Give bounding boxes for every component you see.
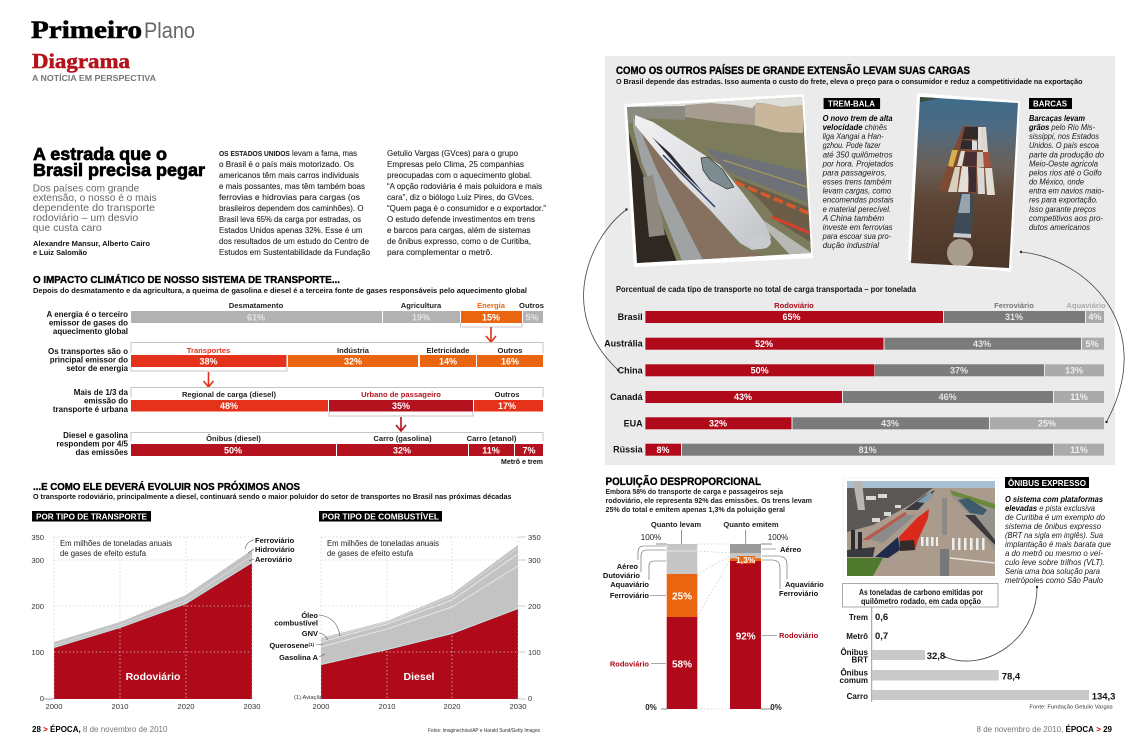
row 2: energy sectors: 16% — [501, 356, 519, 366]
chart: share carried vs emitted: Quanto emitem — [723, 520, 779, 529]
body text column 1: o Brasil é o país mais motorizado. Os — [219, 160, 354, 169]
row: Austrália: 5% — [1085, 339, 1099, 349]
row 2: energy sectors: Os transportes são o — [48, 347, 128, 356]
tag: POR TIPO DE COMBUSTÍVEL — [322, 510, 439, 522]
text: Trem-bala: por hora. Projetados — [822, 159, 894, 168]
body text column 1: Brasil leva 65% da carga por estradas, os — [219, 215, 361, 224]
text: Trem-bala: encomendas postais — [823, 196, 894, 205]
text: Ônibus expresso: a do metrô ou mesmo o veí- — [1005, 549, 1103, 558]
text: Trem-bala: até 350 quilômetros — [823, 150, 893, 159]
area chart: by transport type: Em milhões de toneladas anuais — [60, 539, 172, 548]
row 4: fuel split: Carro (etanol) — [467, 434, 517, 443]
area chart: by transport type — [31, 511, 295, 711]
row: Brasil: Brasil — [618, 312, 643, 322]
heading: projection — [33, 480, 512, 501]
row 1: energy share: 19% — [412, 312, 430, 322]
row 3: transport split — [53, 388, 543, 416]
chart: carbon per km: 134,3 — [1092, 692, 1115, 702]
panel heading: O Brasil depende das estradas. Isso aumenta o custo do frete, eleva o preço para o consumidor e reduz a competitividade na exportação — [616, 77, 1083, 86]
area chart: by transport type: Rodoviário — [126, 671, 180, 683]
row: Rússia: 8% — [656, 445, 670, 455]
area chart: by fuel type: 0 — [528, 694, 532, 703]
heading: disproportionate pollution: 25% do total e emitem apenas 1,3% da poluição geral — [606, 505, 785, 514]
row 4: fuel split: 11% — [482, 446, 500, 456]
body text column 2: Getulio Vargas (GVces) para o grupo — [387, 149, 518, 158]
text: Ônibus expresso — [1005, 495, 1111, 585]
arrow: urban to fuel — [396, 417, 406, 431]
row 4: fuel split: Carro (gasolina) — [373, 434, 432, 443]
right column: emitted: 92% — [736, 632, 756, 642]
chart: carbon per km: 0,6 — [875, 612, 888, 623]
row: Brasil: 4% — [1088, 312, 1102, 322]
section title: Diagrama: Diagrama — [32, 49, 131, 73]
row: Canadá: Canadá — [610, 392, 644, 402]
row 1: energy share: Desmatamento — [229, 301, 284, 310]
byline — [33, 239, 150, 257]
area chart: by transport type: de gases de efeito estufa — [60, 549, 147, 558]
footer left — [32, 725, 540, 734]
chart: carbon per km: Ônibus — [840, 648, 869, 657]
dotted connectors — [697, 544, 730, 709]
area chart: by transport type: Hidroviário — [255, 545, 295, 554]
text: Barcas: Isso garante preços — [1029, 205, 1096, 214]
heading: disproportionate pollution — [606, 475, 812, 514]
row 1: energy share: Outros — [519, 301, 544, 310]
row 2: energy sectors: 38% — [199, 356, 218, 366]
byline: Alexandre Mansur, Alberto Cairo — [33, 239, 150, 248]
standfirst: rodoviário – um desvio — [33, 212, 138, 224]
area chart: by fuel type: de gases de efeito estufa — [327, 549, 414, 558]
row 4: fuel split: Diesel e gasolina — [63, 431, 129, 440]
row: EUA: EUA — [624, 418, 643, 428]
row 4: fuel split: 32% — [393, 446, 411, 456]
row: Canadá: 46% — [939, 392, 957, 402]
row: Rússia — [613, 444, 1104, 456]
body text column 2 — [387, 149, 546, 257]
chart: carbon per km: 32,8 — [927, 651, 945, 662]
text: Trem-bala: O novo trem de alta — [823, 114, 893, 123]
heading: disproportionate pollution: Embora 58% do transporte de carga e passageiros seja — [606, 487, 784, 496]
row 4: fuel split: 7% — [522, 446, 536, 456]
text: Trem-bala: velocidade chinês — [823, 123, 887, 132]
area chart: by fuel type: 100 — [528, 648, 541, 657]
row 1: energy share: Energia — [477, 301, 506, 310]
left column: carried: 25% — [672, 592, 692, 602]
standfirst: dependente do transporte — [33, 202, 155, 214]
heading: projection: ...E COMO ELE DEVERÁ EVOLUIR NOS PRÓXIMOS ANOS — [33, 480, 300, 493]
text: Ônibus expresso: culo leve sobre trilhos (VLT). — [1005, 558, 1105, 567]
heading: projection: O transporte rodoviário, principalmente a diesel, continuará sendo o maior poluidor do setor de transportes no Brasil nas próximas décadas — [33, 492, 512, 501]
chart: modal share by country — [604, 285, 1106, 456]
heading: disproportionate pollution: POLUIÇÃO DESPROPORCIONAL — [606, 475, 761, 488]
row: Rússia: Rússia — [613, 445, 644, 455]
footer left: Fotos: Imaginechina/AP e Harald Sund/Getty Images — [428, 728, 540, 734]
area chart: by transport type: 2000 — [46, 702, 62, 711]
row: EUA: 25% — [1038, 418, 1056, 428]
row 3: transport split: 48% — [220, 401, 238, 411]
row 2: energy sectors: 32% — [344, 356, 362, 366]
area chart: by fuel type: (1) Aviação — [294, 695, 323, 701]
footer right: 8 de novembro de 2010, ÉPOCA > 29 — [977, 725, 1113, 734]
area chart: by transport type: 200 — [31, 602, 44, 611]
standfirst: Dos países com grande — [33, 182, 139, 194]
chart: share carried vs emitted: Aquaviário — [610, 580, 649, 589]
area chart: by fuel type: 200 — [528, 602, 541, 611]
body text column 1: ferrovias e hidrovias para cargas (os — [219, 193, 360, 202]
standfirst: que custa caro — [33, 222, 102, 234]
area chart: by transport type: 300 — [31, 556, 44, 565]
text: Trem-bala: dução industrial — [823, 241, 879, 250]
row 1: energy share: 15% — [482, 312, 500, 322]
area chart: by transport type: 100 — [31, 648, 44, 657]
text: Barcas: do México, onde — [1029, 178, 1084, 186]
chart: share carried vs emitted — [603, 520, 824, 712]
text: Barcas: parte da produção do — [1028, 150, 1104, 159]
row 4: fuel split — [56, 431, 543, 466]
area chart: by fuel type: (1) — [308, 642, 315, 647]
body text column 2: preocupadas com o aquecimento global. — [387, 171, 532, 180]
tag: Ônibus expresso: ÔNIBUS EXPRESSO — [1008, 477, 1086, 488]
text: Barcas: dutos americanos — [1029, 223, 1090, 232]
row: Brasil — [618, 311, 1104, 323]
chart: carbon per km: 0,7 — [875, 631, 888, 642]
body text column 1 — [219, 149, 370, 257]
text: Barcas: Meio-Oeste agrícola — [1029, 159, 1098, 168]
area chart: by transport type: 2010 — [112, 702, 128, 711]
right column: emitted — [730, 544, 761, 709]
text: Ônibus expresso: (BRT na sigla em inglês). Sua — [1005, 531, 1103, 540]
row 3: transport split: Mais de 1/3 da — [74, 388, 129, 397]
area chart: by transport type: 2020 — [178, 702, 194, 711]
text: Barcas: competitivos aos pro- — [1029, 214, 1103, 223]
row: China — [618, 364, 1104, 376]
chart: carbon per km: Metrô — [846, 632, 868, 641]
area chart: by transport type: 0 — [40, 694, 44, 703]
photo: express bus — [843, 478, 998, 579]
area chart: by fuel type: 300 — [528, 556, 541, 565]
row 3: transport split: Regional de carga (diesel) — [182, 390, 277, 399]
row: EUA — [624, 417, 1104, 429]
area chart: by fuel type: 2000 — [313, 702, 329, 711]
area chart: by fuel type: 2030 — [510, 702, 526, 711]
arrow: train to China — [584, 208, 628, 371]
section title: Diagrama: A NOTÍCIA EM PERSPECTIVA — [32, 73, 156, 83]
row: EUA: 43% — [881, 418, 899, 428]
area chart: by fuel type: 350 — [528, 533, 541, 542]
heading: climate impact: Depois do desmatamento e da agricultura, a queima de gasolina e diesel é a terceira fonte de gases responsáveis pelo aquecimento global — [33, 286, 527, 295]
tag: Barcas: BARCAS — [1033, 98, 1067, 108]
right column: emitted: 1,3% — [736, 555, 756, 565]
row 2: energy sectors: Outros — [498, 346, 522, 355]
left column: carried — [667, 544, 697, 709]
row: China: China — [618, 365, 644, 375]
row: Canadá — [610, 391, 1104, 403]
row 1: energy share — [46, 301, 544, 336]
arrow: energy to sectors — [486, 327, 496, 342]
text: Ônibus expresso: elevadas e pista exclusiva — [1005, 504, 1095, 513]
text: Ônibus expresso: sistema de ônibus expresso — [1005, 522, 1101, 531]
row 3: transport split: Urbano de passageiro — [361, 390, 441, 399]
row: China: 13% — [1065, 366, 1083, 376]
area chart: by fuel type: Óleo — [301, 611, 318, 620]
row 2: energy sectors: principal emissor do — [50, 356, 128, 364]
text: Trem-bala: esses trens também — [823, 178, 892, 186]
chart: share carried vs emitted: Aéreo — [617, 562, 638, 571]
section title: Diagrama — [32, 49, 156, 83]
panel: how other countries move freight — [604, 56, 1115, 465]
row: Canadá: 11% — [1070, 392, 1088, 402]
area chart: by fuel type: Em milhões de toneladas anuais — [327, 539, 439, 548]
text: Ônibus expresso: metrópoles como São Paulo — [1005, 576, 1103, 585]
chart title box: As toneladas de carbono emitidas por — [859, 588, 983, 597]
row 3: transport split: 17% — [498, 401, 516, 411]
photo: bullet train — [620, 90, 820, 270]
footer left: 28 > ÉPOCA, 8 de novembro de 2010 — [32, 725, 168, 734]
panel heading — [616, 64, 1083, 86]
area chart: by fuel type: 2020 — [444, 702, 460, 711]
body text column 1: Estudos em Sustentabilidade da Fundação — [219, 248, 370, 257]
text: Trem-bala: liga Xangai a Han- — [823, 132, 884, 141]
body text column 2: Empresas pelo Clima, 25 companhias — [387, 160, 524, 169]
row 2: energy sectors: setor de energia — [66, 364, 129, 373]
text: Barcas: Barcaças levam — [1029, 114, 1085, 123]
row: Canadá: 43% — [734, 392, 752, 402]
area chart: by fuel type: Querosene — [269, 641, 308, 650]
panel heading: COMO OS OUTROS PAÍSES DE GRANDE EXTENSÃO LEVAM SUAS CARGAS — [616, 64, 970, 77]
area chart: by transport type: Aeroviário — [255, 555, 293, 564]
text: Trem-bala — [822, 114, 894, 250]
text: Barcas: pelos rios até o Golfo — [1028, 168, 1102, 178]
text: Trem-bala: e material perecível. — [823, 205, 891, 214]
text: Trem-bala: gzhou. Pode fazer — [823, 141, 881, 150]
chart: carbon per km: BRT — [852, 656, 868, 664]
area chart: by fuel type: Gasolina A — [279, 653, 319, 662]
row 1: energy share: 61% — [247, 312, 265, 322]
heading: climate impact — [33, 273, 527, 295]
body text column 1: OS ESTADOS UNIDOS levam a fama, mas — [219, 149, 357, 158]
row 4: fuel split: Metrô e trem — [501, 459, 543, 466]
area chart: by fuel type: 2010 — [379, 702, 395, 711]
text: Ônibus expresso: O sistema com plataformas — [1005, 495, 1103, 504]
text: Trem-bala: para escoar sua pro- — [822, 232, 891, 241]
row: Austrália — [604, 338, 1104, 350]
arrow: transport to split — [204, 372, 214, 387]
text: Barcas: sissippi, nos Estados — [1029, 132, 1099, 141]
chart: share carried vs emitted: Aquaviário — [785, 580, 824, 589]
row 3: transport split: Outros — [495, 390, 519, 399]
chart: share carried vs emitted: 0% — [645, 703, 657, 712]
chart: carbon per km: Ônibus — [840, 669, 869, 678]
stacked bars: climate cascade — [46, 301, 544, 466]
area chart: by fuel type: GNV — [302, 629, 318, 638]
chart: modal share by country: Rodoviário — [774, 301, 814, 310]
heading: disproportionate pollution: rodoviário, ele representa 92% das emissões. Os trens levam — [606, 496, 812, 505]
text: Ônibus expresso: implantação é mais barata que — [1005, 540, 1111, 549]
body text column 2: cara”, diz o biólogo Luiz Pires, do GVces. — [387, 193, 534, 202]
text: Barcas: Unidos. O país escoa — [1029, 141, 1099, 150]
byline: e Luiz Salomão — [33, 248, 87, 257]
area chart: by transport type: 2030 — [244, 702, 260, 711]
row 2: energy sectors: 14% — [439, 356, 457, 366]
row 2: energy sectors: Eletricidade — [426, 346, 470, 355]
text: Trem-bala: para passageiros, — [822, 168, 887, 178]
tag: POR TIPO DE TRANSPORTE — [36, 512, 147, 522]
left column: carried: 58% — [672, 660, 692, 670]
chart: share carried vs emitted: Dutoviário — [603, 571, 640, 580]
tag: Trem-bala: TREM-BALA — [828, 98, 875, 108]
photo: barges — [905, 93, 1025, 272]
headline: Brasil precisa pegar — [33, 160, 205, 180]
row: Austrália: 43% — [973, 339, 991, 349]
chart: modal share by country: Aquaviário — [1066, 301, 1106, 310]
chart: carbon per km: Carro — [847, 692, 868, 701]
chart: share carried vs emitted: 100% — [768, 533, 788, 542]
page masthead: Primeiro Plano: Primeiro — [31, 17, 142, 44]
body text column 1: e mais possantes, mas têm também boas — [219, 182, 365, 191]
body text column 2: e barcos para cargas, além de sistemas — [387, 226, 530, 235]
row 4: fuel split: 50% — [224, 446, 242, 456]
row 3: transport split: emissão do — [84, 396, 128, 406]
page masthead: Primeiro Plano — [31, 17, 195, 44]
row 3: transport split: transporte é urbana — [53, 405, 129, 414]
text: Barcas: entra em navios maio- — [1029, 187, 1104, 196]
row 1: energy share: A energia é o terceiro — [46, 310, 128, 319]
row: EUA: 32% — [709, 418, 727, 428]
row 2: energy sectors: Indústria — [337, 346, 370, 355]
chart: modal share by country: Porcentual de cada tipo de transporte no total de carga transportada – por tonelada — [616, 285, 917, 294]
row: Rússia: 11% — [1070, 445, 1088, 455]
chart: share carried vs emitted: Aéreo — [780, 545, 802, 554]
body text column 1: brasileiros dependem dos caminhões). O — [219, 204, 364, 213]
arrow: bus text to BRT bar — [943, 586, 1038, 661]
chart: modal share by country: Ferroviário — [994, 301, 1034, 310]
area chart: by fuel type: Diesel — [404, 671, 435, 683]
row 1: energy share: aquecimento global — [53, 327, 128, 336]
row: Brasil: 65% — [782, 312, 801, 322]
standfirst — [33, 182, 157, 234]
chart: carbon per km: Fonte: Fundação Getulio Vargas — [1029, 704, 1113, 710]
text: Trem-bala: A China também — [822, 214, 884, 223]
row: China: 37% — [950, 366, 968, 376]
area chart: by transport type: Ferroviário — [255, 536, 295, 545]
chart: share carried vs emitted: Rodoviário — [610, 660, 649, 668]
chart title box — [842, 584, 998, 607]
row 3: transport split: 35% — [392, 401, 410, 411]
headline: A estrada que o — [33, 144, 167, 164]
body text column 2: de ônibus expresso, como o de Curitiba, — [387, 237, 531, 246]
body text column 2: para complementar o metrô. — [387, 248, 492, 257]
body text column 2: “Quem paga é o consumidor e o exportador.” — [387, 204, 546, 213]
row 1: energy share: Agricultura — [401, 301, 442, 310]
row: Austrália: Austrália — [604, 339, 644, 349]
chart: share carried vs emitted: 0% — [770, 703, 782, 712]
body text column 1: americanos têm mais carros individuais — [219, 171, 359, 180]
chart: share carried vs emitted: Quanto levam — [651, 520, 701, 529]
row: Austrália: 52% — [755, 339, 773, 349]
row: Rússia: 81% — [859, 445, 877, 455]
chart: share carried vs emitted: Ferroviário — [779, 589, 819, 598]
heading: climate impact: O IMPACTO CLIMÁTICO DE NOSSO SISTEMA DE TRANSPORTE... — [33, 273, 340, 286]
chart title box: quilômetro rodado, em cada opção — [861, 597, 981, 606]
text: Barcas: res para exportação. — [1029, 196, 1098, 205]
headline — [33, 144, 205, 180]
chart: share carried vs emitted: Rodoviário — [779, 631, 819, 640]
row: China: 50% — [751, 366, 769, 376]
area chart: by fuel type: combustível — [274, 618, 318, 628]
page masthead: Primeiro Plano: Plano — [144, 18, 195, 43]
row 1: energy share: emissor de gases do — [49, 318, 128, 328]
text: Trem-bala: investe em ferrovias — [823, 223, 893, 232]
body text column 1: Estados Unidos apenas 32%. Esse é um — [219, 226, 363, 235]
area chart: by transport type: 350 — [31, 533, 44, 542]
standfirst: extensão, o nosso é o mais — [33, 192, 157, 204]
text: Ônibus expresso: Seria uma boa solução para — [1005, 567, 1100, 576]
area chart: by fuel type — [269, 510, 541, 711]
row 4: fuel split: Ônibus (diesel) — [206, 434, 261, 443]
chart: carbon per km — [840, 584, 1115, 710]
chart: share carried vs emitted: Ferroviário — [610, 591, 649, 600]
text: Barcas: grãos pelo Rio Mis- — [1028, 123, 1095, 132]
text: Trem-bala: levam cargas, como — [823, 187, 892, 196]
chart: carbon per km: 78,4 — [1002, 672, 1021, 682]
row 4: fuel split: respondem por 4/5 — [56, 440, 129, 448]
chart: share carried vs emitted: 100% — [641, 533, 661, 542]
body text column 2: “A opção rodoviária é mais poluidora e mais — [387, 182, 542, 191]
chart: carbon per km: Trem — [849, 613, 868, 622]
row 2: energy sectors: Transportes — [187, 346, 230, 355]
row 2: energy sectors — [48, 342, 543, 373]
body text column 1: dos resultados de um estudo do Centro de — [219, 237, 369, 246]
body text column 2: O estudo defende investimentos em trens — [387, 215, 535, 224]
row: Brasil: 31% — [1005, 312, 1023, 322]
arrow: barges to USA — [1020, 251, 1124, 423]
text: Ônibus expresso: de Curitiba é um exemplo do — [1005, 513, 1105, 522]
text: Barcas — [1028, 114, 1104, 232]
row 4: fuel split: das emissões — [76, 448, 129, 457]
row 1: energy share: 5% — [525, 312, 539, 322]
chart: carbon per km: comum — [840, 676, 868, 685]
